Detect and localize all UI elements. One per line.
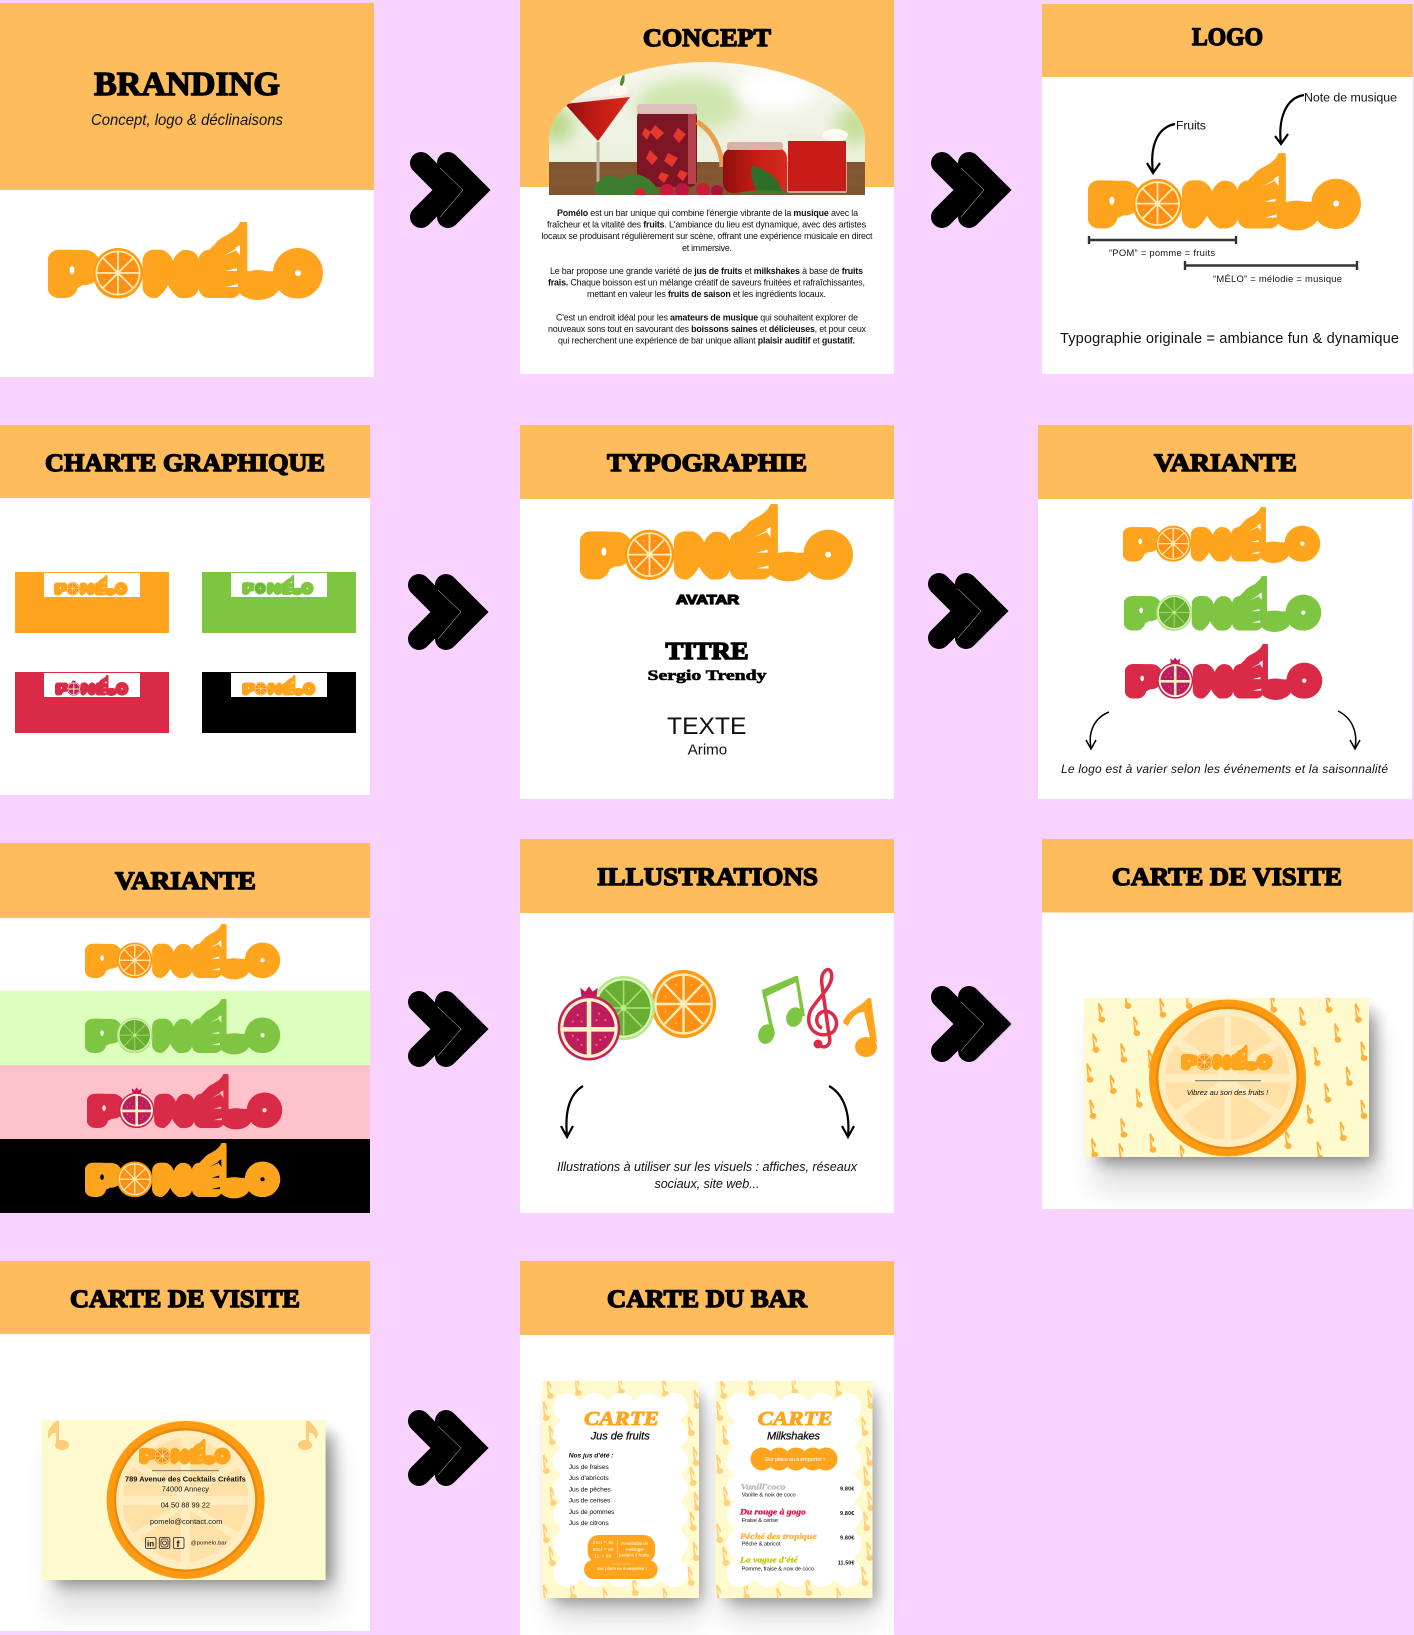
icon: linkedin [146,1538,156,1548]
price blob: 1L = 6€ [594,1554,612,1559]
caption: illustrations [557,1160,858,1191]
panel: charte graphique [0,425,370,795]
business card back [42,1420,326,1580]
item: peche des tropique [740,1532,854,1548]
panel: variante colours [1038,425,1412,799]
logo: orange annotated: POMÉLO [1096,140,1351,226]
open lid [697,122,722,167]
item: vanill'coco [741,1482,854,1499]
arrow: curved right [829,1086,854,1137]
swatch: orange [15,572,169,633]
panel: typographie [520,425,894,799]
row: pale pink [0,1065,370,1139]
item: la vague d'ete: 11.50€ [838,1560,854,1566]
font label: avatar: AVATAR [676,592,740,607]
body text: nouveaux sons tout en savourant des boissons saines et délicieuses, et pour ceux [548,324,867,334]
logo: red: POMÉLO [1131,634,1315,697]
juice list: Jus d'abricots [569,1475,609,1482]
title: branding: BRANDING [94,66,280,103]
leaves and raspberries [593,166,795,198]
menu subtitle: Milkshakes [767,1430,820,1442]
panel: branding [0,3,374,377]
caption: melo: “MÉLO” = mélodie = musique [1213,273,1342,284]
arrow: typographie to variante [939,584,993,638]
title: variante: VARIANTE [115,868,256,895]
menu: milkshakes [716,1376,874,1607]
contact details: 04 50 88 99 22 [161,1501,210,1510]
row: black [0,1134,370,1213]
price blob: jusqu'à 3 fruits. [618,1552,650,1558]
business card front [1084,990,1369,1164]
arrow: illustrations to carte de visite [942,997,996,1051]
juice list: Jus de pommes [569,1509,615,1516]
subtitle: Concept, logo & déclinaisons [91,112,283,129]
title: concept: CONCEPT [643,25,771,52]
title: typographie: TYPOGRAPHIE [607,450,807,477]
arrow: to note [1275,95,1304,144]
orange slice circle [107,1421,265,1579]
takeaway blob: Sur place ou à emporter ! [765,1457,825,1463]
juice list: Jus de cerises [569,1498,611,1505]
title: variante: VARIANTE [1154,450,1297,477]
label: fruits: Fruits [1176,119,1206,133]
smoothie glass [787,129,848,193]
contact details [125,1474,246,1526]
logo: card back: POMÉLO [142,1435,227,1464]
body text [542,208,873,346]
arrow: variante to illustrations [419,1002,473,1056]
logo: orange: POMÉLO [56,209,313,296]
caption: typography: Typographie originale = ambiance fun & dynamique [1060,331,1399,347]
logo: card: POMÉLO [1184,1041,1269,1070]
arrow: branding to concept [421,163,475,217]
contact details: pomelo@contact.com [150,1517,222,1526]
logo: green: POMÉLO [1130,566,1314,629]
icon: facebook: f [176,1539,180,1549]
title: carte de visite: CARTE DE VISITE [70,1286,300,1313]
swatch: black: POMÉLO [244,673,313,695]
icon: pomegranate [558,986,620,1060]
body text: locaux se produisant régulièrement sur scène, offrant une expérience musicale en direct [542,231,873,241]
body text: mettant en valeur les fruits de saison et les ingrédients locaux. [587,289,826,299]
row: pale pink: POMÉLO [93,1065,275,1126]
body text: Le bar propose une grande variété de jus de fruits et milkshakes à base de fruits [550,266,863,276]
icon: orange note [843,998,877,1057]
photo: red drinks and fruit jars [538,62,875,198]
caption: illustrations: Illustrations à utiliser sur les visuels : affiches, réseaux [557,1160,858,1174]
card shadow [52,1434,337,1612]
logo: orange: POMÉLO [588,491,843,577]
price blob: 33cl = 4€ [593,1540,614,1545]
title: charte graphique: CHARTE GRAPHIQUE [45,450,325,477]
caption: illustrations: sociaux, site web... [654,1177,760,1191]
row: white: POMÉLO [91,915,273,976]
font sample: titre: TITRE [666,639,748,665]
swatch: red: POMÉLO [57,673,126,695]
item: la vague d'ete: Pomme, fraise & noix de coco [742,1567,814,1573]
body text: qui recherchent une expérience de bar unique alliant plaisir auditif et gustatif. [558,336,855,346]
swatch: red [15,672,169,733]
menu title: CARTE [758,1408,833,1430]
panel: logo [1042,4,1413,374]
body text: et immersive. [682,243,732,253]
panel: carte de visite front [1042,839,1413,1209]
row: white [0,915,370,991]
icon: instagram [159,1538,170,1548]
bracket: pom [1089,236,1236,244]
card shadow [1095,1012,1380,1190]
caption: pom: “POM” = pomme = fruits [1109,247,1215,258]
juice list: Nos jus d'été : [569,1452,613,1459]
arrow: curved right [1338,711,1360,749]
icon: linkedin: in [147,1540,154,1548]
arrow: carte de visite to carte du bar [419,1421,473,1475]
swatch: green [202,572,356,633]
arrow: curved left [561,1086,583,1137]
caption: logo variation: Le logo est à varier selon les événements et la saisonnalité [1061,762,1388,776]
juice list [569,1452,615,1527]
item: du rouge a gogo: Du rouge à gogo [739,1507,806,1516]
price blob: Sur place ou à emporter ! [597,1566,648,1571]
body text: frais. Chaque boisson est un mélange créatif de saveurs fruitées et rafraîchissantes, [548,278,865,288]
icon: lime slice [592,976,655,1040]
price blob: Possibilité de [621,1541,649,1546]
title: carte du bar: CARTE DU BAR [607,1286,808,1313]
body text: fraîcheur et la vitalité des fruits. L'ambiance du lieu est dynamique, avec des artistes [547,220,867,230]
juice list: Jus de fraises [569,1464,609,1471]
arrow: charte to typographie [419,585,473,639]
price blob [584,1535,658,1579]
item: la vague d'ete: La vague d'été [739,1556,798,1565]
panel: carte du bar [520,1261,894,1635]
item: peche des tropique: 9.80€ [840,1536,854,1542]
slogan: Vibrez au son des fruits ! [1187,1088,1269,1097]
item: du rouge a gogo: Fraise & cerise [742,1518,778,1524]
body text: Pomélo est un bar unique qui combine l'énergie vibrante de la musique avec la [557,208,858,218]
divider [152,1470,219,1471]
panel: carte de visite back [0,1261,370,1631]
icon: note right [298,1421,318,1450]
strawberry jar [637,104,697,187]
menu shadows [552,1394,876,1622]
logo: orange: POMÉLO [1129,497,1313,560]
item: vanill'coco: 9.80€ [840,1486,854,1492]
arrow: concept to logo [942,163,996,217]
item: peche des tropique: Péché des tropique [740,1532,817,1541]
row: black: POMÉLO [91,1134,273,1195]
menu title: CARTE [584,1408,659,1430]
panel: illustrations [520,839,894,1213]
panel: variante backgrounds [0,843,370,1213]
takeaway blob [750,1448,838,1470]
title: carte de visite: CARTE DE VISITE [1112,864,1342,891]
body text: C'est un endroit idéal pour les amateurs de musique qui souhaitent explorer de [556,312,858,322]
item: peche des tropique: Pêche & abricot [742,1542,781,1548]
orange slice circle [1149,1000,1306,1156]
menu subtitle: Jus de fruits [590,1430,650,1442]
juice list: Jus de pêches [569,1486,611,1493]
small jam jar [723,142,787,193]
menu: jus de fruits [542,1376,701,1607]
icon: facebook [174,1538,184,1549]
item: du rouge a gogo: 9.80€ [840,1511,854,1517]
title: illustrations: ILLUSTRATIONS [597,864,818,891]
note pattern [1086,990,1367,1164]
label: note de musique: Note de musique [1304,91,1397,105]
font name: sergio trendy: Sergio Trendy [648,668,767,684]
panel: concept [520,0,894,374]
contact details: 789 Avenue des Cocktails Créatifs [125,1474,246,1483]
icon: green double note [755,976,805,1046]
row: pale green: POMÉLO [91,990,273,1051]
juice list: Jus de citrons [569,1520,609,1527]
row: pale green [0,990,370,1065]
bracket: melo [1185,261,1357,270]
font name: arimo: Arimo [688,742,727,759]
price blob: 50cl = 5€ [593,1547,614,1552]
item: vanill'coco: Vanille & noix de coco [742,1493,796,1499]
social handle: @pomelo.bar [191,1541,227,1547]
swatch: black [202,672,356,733]
contact details: 74000 Annecy [162,1484,209,1493]
icon: orange slice [651,970,716,1038]
arrow: curved left [1086,712,1109,749]
swatch: green: POMÉLO [244,572,311,595]
price blob: mélanger [626,1547,644,1552]
item: du rouge a gogo [739,1507,854,1524]
icon: treble clef [809,970,837,1048]
font sample: texte: TEXTE [667,713,746,740]
arrow: to fruit [1147,124,1175,173]
title: logo: LOGO [1192,24,1263,51]
icon: note left [48,1421,69,1450]
martini glass [562,74,634,182]
divider [1195,1080,1261,1081]
item: la vague d'ete [739,1556,854,1573]
swatch: orange: POMÉLO [56,573,125,595]
item: vanill'coco: Vanill'coco [741,1482,786,1491]
